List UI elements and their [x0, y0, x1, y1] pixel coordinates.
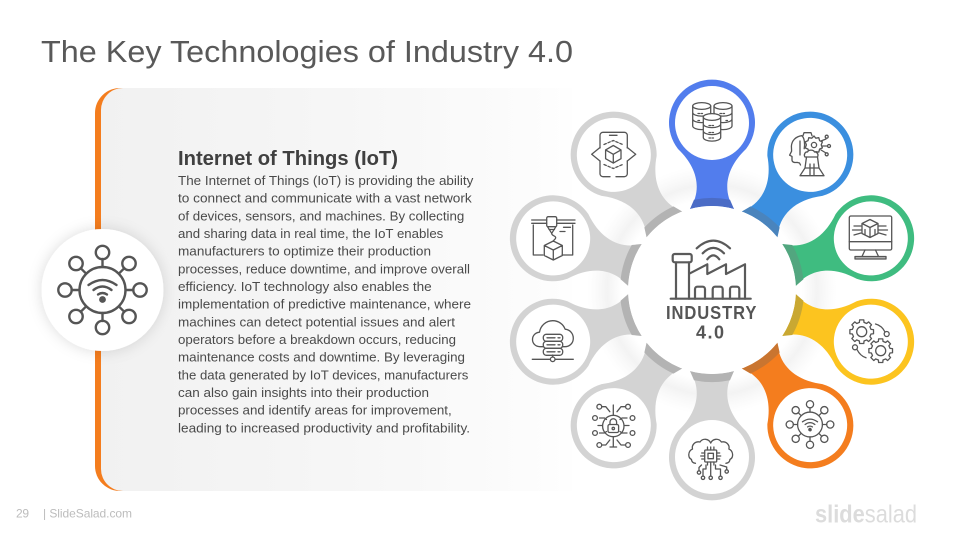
hub label — [666, 303, 757, 342]
node: digital twin monitor (green) — [776, 184, 925, 306]
panel: text card — [95, 88, 572, 491]
node: internet of things (orange) — [725, 330, 870, 485]
icon: gears — [850, 320, 893, 363]
body text: processes, reduce downtime, and improve overall — [178, 262, 470, 276]
body text: The Internet of Things (IoT) is providing the ability — [178, 174, 474, 188]
hub label: INDUSTRY — [666, 303, 757, 323]
node: cyber security (grey) — [554, 330, 699, 485]
body text: manufacturers to optimize their production — [178, 245, 431, 259]
body text — [178, 174, 474, 435]
icon: circuit padlock — [593, 404, 635, 447]
icon: brain with chip — [689, 439, 733, 479]
node: 3D printing (grey) — [499, 184, 648, 306]
title: The Key Technologies of Industry 4.0 — [41, 34, 573, 69]
page number: 29 — [16, 507, 29, 521]
body text: can also gain insights into their production — [178, 386, 429, 400]
icon: AR phone with cube — [592, 132, 636, 177]
node: artificial intelligence (sky blue) — [725, 95, 870, 250]
body text: of devices, sensors, and machines. By collecting — [178, 209, 464, 223]
node: cloud computing (grey) — [499, 274, 648, 396]
body text: and sharing data in real time, the IoT enables — [178, 227, 443, 241]
body text: efficiency. IoT technology also enables the — [178, 280, 432, 294]
node: cloud databases (blue) — [669, 80, 755, 209]
body text: implementation of predictive maintenance, where — [178, 298, 471, 312]
hub: industry 4.0 — [628, 206, 796, 374]
icon: AI head with gear — [790, 133, 830, 176]
node: robotics gears (yellow) — [776, 274, 925, 396]
halo behind hub — [587, 165, 837, 415]
body text: operators before a breakdown occurs, reducing — [178, 333, 456, 347]
icon: smart factory — [671, 241, 751, 299]
panel heading: Internet of Things (IoT) — [178, 148, 398, 170]
icon: 3D printer — [532, 217, 575, 260]
body text: maintenance costs and downtime. By leveraging — [178, 351, 465, 365]
node: augmented reality (grey) — [554, 95, 699, 250]
hub label: 4.0 — [696, 322, 725, 342]
icon: database stack — [693, 103, 732, 141]
body text: leading to increased productivity and profitability. — [178, 421, 470, 435]
body text: to connect and communicate with a vast network — [178, 192, 472, 206]
icon: cloud server — [532, 321, 573, 362]
icon: monitor with cube — [849, 216, 892, 259]
icon badge: internet of things — [42, 229, 164, 351]
body text: machines can detect potential issues and alert — [178, 315, 456, 329]
icon: connected wifi hub — [786, 401, 834, 448]
body text: processes and identify areas for improvement, — [178, 404, 452, 418]
body text: the data generated by IoT devices, manufacturers — [178, 368, 468, 382]
footer site: | SlideSalad.com — [43, 507, 132, 521]
node: brain chip (grey) — [669, 371, 755, 500]
logo: slidesalad: slidesalad — [815, 501, 917, 529]
